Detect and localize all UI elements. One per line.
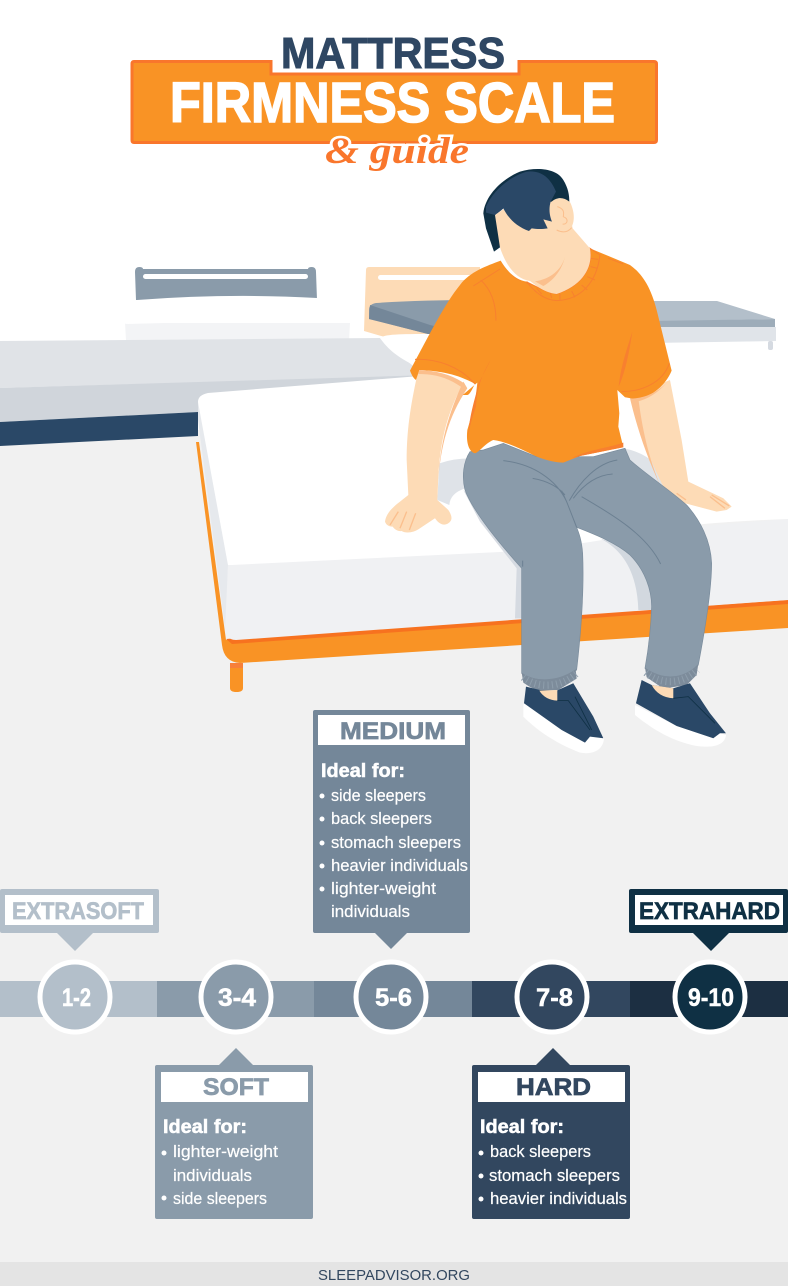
bed side: [0, 375, 430, 422]
chin shade: [535, 257, 565, 286]
hair front: [486, 171, 556, 231]
headboard: left: [135, 267, 317, 300]
arm: left: [385, 370, 467, 532]
callout: medium: [313, 710, 470, 949]
marker 3-4: 3-4: [218, 984, 256, 1012]
shirt, head and hair: [410, 169, 672, 463]
neck and face: [495, 193, 591, 294]
ear: [551, 198, 574, 232]
callout: soft: lighter-weight: [173, 1143, 278, 1161]
footer: SLEEPADVISOR.ORG: [318, 1267, 470, 1284]
callout: medium: stomach sleepers: [331, 834, 461, 852]
callout: extra hard: [629, 889, 788, 951]
marker 5-6: 5-6: [375, 984, 412, 1012]
footer: [0, 1262, 788, 1286]
callout: soft: [155, 1048, 313, 1219]
callout: hard: Ideal for:: [480, 1117, 564, 1138]
callout: hard: back sleepers: [490, 1143, 591, 1161]
callout: medium: MEDIUM: [340, 718, 446, 745]
shoulder edge shading: [501, 261, 537, 287]
floor: [0, 430, 788, 1262]
collar ribs and shirt folds: [537, 258, 598, 300]
shoes: [523, 680, 726, 753]
bed top surface: [0, 338, 425, 388]
marker 3-4: [201, 962, 271, 1032]
mattress shadow: [437, 448, 667, 618]
mattress front: [225, 519, 788, 640]
far mattress: [369, 300, 776, 350]
callout: hard: stomach sleepers: [489, 1167, 620, 1185]
bed base: [0, 412, 198, 446]
mattress top: [198, 376, 788, 565]
callout: extra soft: EXTRASOFT: [12, 898, 144, 925]
bed frame: [196, 442, 788, 663]
arm: right: [630, 380, 732, 512]
callout: hard: heavier individuals: [490, 1190, 627, 1208]
marker 5-6: [356, 962, 426, 1032]
legs and pants: [463, 443, 712, 691]
headboard: peach: [364, 267, 480, 340]
callout: hard: HARD: [516, 1074, 591, 1101]
callout: medium: heavier individuals: [331, 857, 468, 875]
background bed: [0, 267, 776, 446]
callout: medium: Ideal for:: [321, 761, 405, 782]
bed leg: [230, 663, 243, 692]
marker 1-2: 1-2: [62, 984, 91, 1012]
marker 1-2: [40, 962, 110, 1032]
marker 7-8: 7-8: [536, 984, 573, 1012]
marker 9-10: 9-10: [688, 984, 734, 1012]
callout: medium: side sleepers: [331, 787, 426, 805]
callout: soft: Ideal for:: [163, 1117, 247, 1138]
marker 9-10: [675, 962, 745, 1032]
firmness scale bar: [0, 962, 788, 1032]
mattress side: [198, 400, 228, 635]
callout: medium: lighter-weight: [331, 880, 436, 898]
shirt: [410, 248, 672, 463]
callout: soft: side sleepers: [173, 1190, 267, 1208]
callout: soft: individuals: [173, 1167, 252, 1185]
title word: mattress: MATTRESS: [281, 29, 505, 78]
banner: [132, 62, 656, 142]
foreground bed: [196, 376, 788, 692]
hair back: [483, 169, 569, 252]
callout: extra soft: [0, 889, 159, 951]
callout: medium: back sleepers: [331, 810, 432, 828]
collar: [527, 248, 600, 301]
marker 7-8: [517, 962, 587, 1032]
pillow: [125, 296, 350, 340]
person: [385, 169, 732, 753]
callout: extra hard: EXTRAHARD: [639, 898, 780, 925]
title: [132, 29, 656, 172]
title words: firmness scale: FIRMNESS SCALE: [170, 71, 615, 135]
callout: medium: individuals: [331, 903, 410, 921]
callout: soft: SOFT: [203, 1074, 269, 1101]
white blanket: [380, 334, 450, 366]
callout: hard: [472, 1048, 630, 1219]
subtitle: and guide: & guide: [325, 131, 469, 172]
